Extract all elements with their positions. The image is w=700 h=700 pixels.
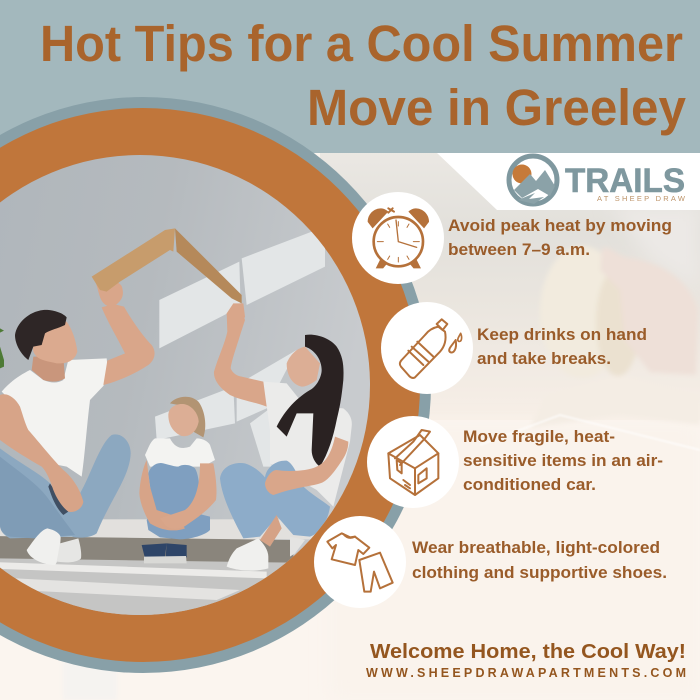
icon: cardboard box [388,430,438,495]
tip 4: clothing [314,516,667,608]
icon: shirt and pants [327,533,393,592]
website: WWW.SHEEPDRAWAPARTMENTS.COM [366,666,686,680]
tip text: drinks: Keep drinks on hand [477,325,647,344]
hand on roof [226,303,245,318]
logo: Trails at Sheep Draw: AT SHEEP DRAW [597,194,686,203]
tip text: peak heat: between 7–9 a.m. [448,240,590,259]
tip 3: fragile items [367,416,663,508]
orange ring [0,108,420,662]
title: Move in Greeley [307,79,687,136]
floor and rug [0,519,367,618]
family photo [0,150,380,620]
tip text: drinks: and take breaks. [477,349,611,368]
logo: Trails at Sheep Draw: TRAILS [565,162,685,200]
header band [0,0,700,153]
cardboard roof [92,228,242,303]
title [40,15,687,136]
tip 1: avoid peak heat [352,192,672,284]
closing tagline: Welcome Home, the Cool Way! [370,640,686,663]
tip 2: drinks and breaks [381,302,647,394]
tip text: clothing [412,538,667,582]
child [139,397,217,563]
tip text: clothing: Wear breathable, light-colored [412,538,660,557]
tip text: drinks [477,325,647,368]
tip text: clothing: clothing and supportive shoes. [412,563,667,582]
icon: alarm clock [368,208,428,267]
logo: Trails at Sheep Draw [509,156,686,204]
tip text: fragile: conditioned car. [463,475,596,494]
logo white background [437,153,700,210]
icon: water bottle [400,319,462,378]
pale column bottom left [63,660,117,700]
faded background photo: hand with packing tape [63,150,700,700]
tip text: peak heat: Avoid peak heat by moving [448,216,672,235]
woman [214,307,352,571]
tip text: fragile [463,427,663,494]
tip text: fragile: Move fragile, heat- [463,427,615,446]
man [0,280,155,565]
title: Hot Tips for a Cool Summer [40,15,683,72]
tip text: fragile: sensitive items in an air- [463,451,663,470]
tip text: peak heat [448,216,672,259]
plant [0,328,4,368]
slate ring [0,97,431,673]
sunlight window panes [155,227,325,467]
